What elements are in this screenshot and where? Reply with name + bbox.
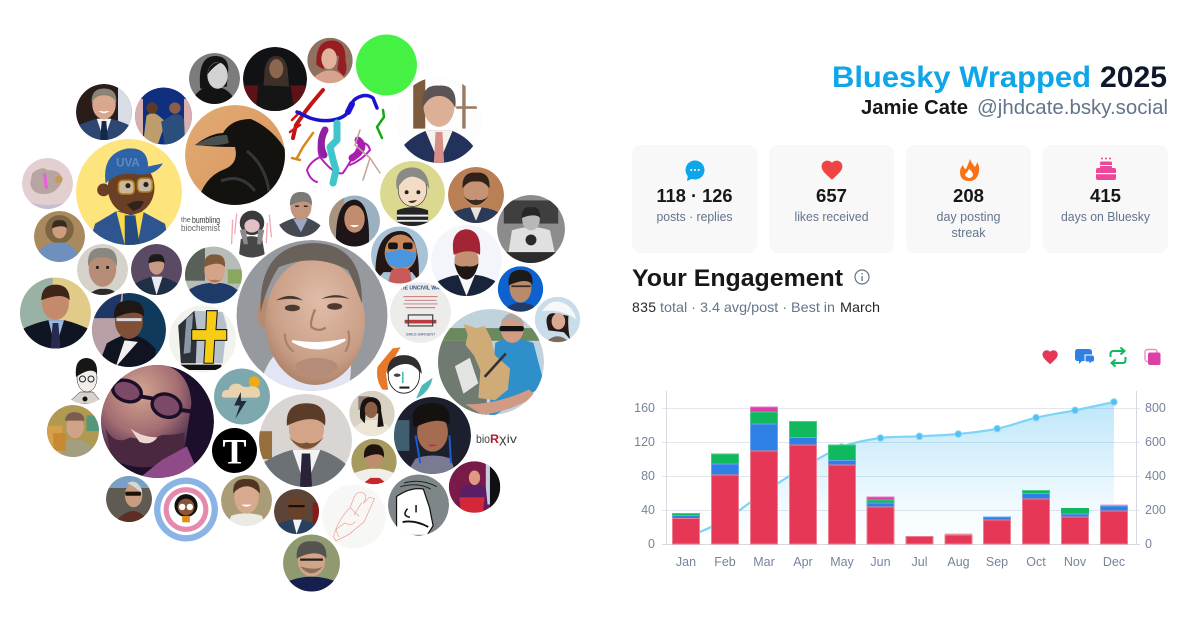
avatar: mitre with yellow cross (169, 305, 236, 373)
panel: day posting streak: 208 (953, 186, 984, 206)
avatar: plain green circle (356, 34, 417, 96)
left axis labels: 120 (634, 435, 655, 449)
right axis labels: 200 (1145, 503, 1166, 517)
avatar: bioRxiv logo: χiv (499, 432, 517, 446)
panel: likes received: likes received (794, 210, 869, 224)
title: 2025 (1100, 61, 1167, 94)
stacked bars by month (672, 407, 1128, 544)
bar: Mar (750, 407, 778, 544)
heading: Your Engagement: Your Engagement (632, 265, 843, 292)
avatar: powerpuff cartoon on pink and blue rings (154, 478, 218, 542)
avatar: man in dark suit against purple curtain (131, 244, 182, 295)
avatar: the bumbling biochemist logo: the (181, 217, 191, 224)
left axis labels: 0 (648, 537, 655, 551)
left axis labels: 80 (641, 469, 655, 483)
avatar: woman with red hair (307, 38, 353, 83)
avatar: black and white portrait of woman (189, 53, 240, 104)
avatar: ink drawing of man in glasses (71, 358, 100, 404)
icon: replies legend (1075, 349, 1094, 364)
avatar: man in blue shirt under stone arch (34, 211, 85, 262)
avatar: red line sketch of reclining figure (322, 484, 386, 548)
panel: day posting streak: day posting (936, 210, 1001, 224)
avatar: older man in blazer (279, 192, 320, 237)
panel: posts and replies (632, 145, 757, 253)
avatar: man with glasses on bright blue (498, 266, 543, 312)
avatar: bioRxiv logo: bio (476, 432, 490, 446)
bar: Feb (712, 454, 738, 544)
right axis labels: 0 (1145, 537, 1152, 551)
month labels: Jun (870, 555, 891, 569)
panel: posts and replies: posts · replies (656, 210, 732, 224)
month labels: Sep (986, 555, 1008, 569)
avatar: woman with curly hair and blue earrings (394, 397, 471, 474)
avatar: two people shaking hands before flags (135, 88, 192, 144)
month labels: Aug (947, 555, 970, 569)
icon: info (855, 270, 869, 284)
bar: Jun (867, 497, 894, 544)
month labels: Jan (676, 555, 696, 569)
avatar: bioRxiv logo: R (490, 432, 499, 446)
bar: Jul (906, 536, 933, 544)
user name and handle: Jamie Cate (861, 97, 968, 119)
grid and axes (662, 391, 1140, 544)
panel: likes received: 657 (816, 186, 847, 206)
avatar: man in sunglasses on street (106, 476, 152, 522)
avatar: bearded man before brick wall (448, 167, 504, 223)
icon: quotes legend (1145, 350, 1160, 365)
right axis labels: 400 (1145, 469, 1166, 483)
avatar: raven on orange background (185, 105, 285, 205)
avatar: woman with glasses and US flag (92, 293, 166, 367)
avatar: grey cartoon face (388, 474, 449, 536)
avatar: cartoon man with blue UVA cap (76, 139, 182, 245)
avatar: man with dog, blue shirt (438, 309, 544, 415)
cumulative area (686, 402, 1114, 544)
avatar: New York Times logo: T (222, 432, 247, 472)
avatar: man in grey suit with polka dot tie (259, 394, 352, 487)
engagement summary: 835 (632, 299, 656, 315)
icon: birthday cake (1096, 158, 1116, 180)
month labels: Apr (793, 555, 813, 569)
avatar: grey haired man close-up (77, 244, 128, 295)
avatar: animated girl with sunglasses and blue mask (371, 226, 428, 284)
avatar: cartoon man with striped shirt on olive (380, 161, 445, 226)
avatar: magenta lit person (449, 461, 500, 513)
panel: day posting streak: streak (952, 226, 986, 240)
icon: chat bubble (686, 160, 704, 181)
bar: May (828, 445, 856, 544)
avatar cluster: most interacted accounts (20, 34, 580, 592)
month labels: May (830, 555, 855, 569)
cumulative points (838, 399, 1117, 450)
panel: posts and replies: 118 · 126 (656, 186, 732, 206)
avatar: New York Times logo (212, 428, 257, 473)
legend icons (1043, 348, 1160, 366)
avatar: protein ribbon structure (290, 90, 384, 183)
icon: heart (822, 161, 842, 180)
bar: Dec (1100, 504, 1128, 544)
engagement summary: total · 3.4 avg/post · Best in (660, 299, 835, 315)
bar: Oct (1022, 490, 1050, 544)
avatar: young man in sports shirt (351, 439, 397, 484)
icon: flame (960, 159, 979, 181)
avatar: pink protein render (22, 158, 73, 209)
engagement summary (632, 299, 880, 315)
title: Bluesky Wrapped (832, 61, 1091, 94)
avatar: weather app logo with cloud and lightning (214, 368, 270, 424)
cumulative line (686, 402, 1114, 538)
avatar: cartoon man with blue UVA cap: UVA (116, 157, 140, 170)
month labels: Oct (1026, 555, 1046, 569)
engagement summary: March (840, 299, 880, 315)
right axis labels (1145, 401, 1166, 551)
bar: Jan (672, 514, 700, 544)
month labels: Mar (753, 555, 775, 569)
icon: likes legend (1043, 350, 1058, 364)
left axis labels (634, 401, 655, 551)
avatar: woman with braids at desk (349, 391, 395, 436)
right axis labels: 800 (1145, 401, 1166, 415)
avatar: grey haired man with glasses outdoors (283, 534, 340, 592)
bar: Nov (1062, 508, 1088, 544)
avatar: woman in black dress, red theatre (243, 47, 307, 111)
panel: days on Bluesky: days on Bluesky (1061, 210, 1151, 224)
avatar: the bumbling biochemist logo: bumbling (192, 215, 220, 226)
left axis labels: 40 (641, 503, 655, 517)
avatar: smiling woman with long dark hair (329, 196, 380, 246)
avatar: blurry close-up of man in dark glasses (99, 363, 214, 478)
user name and handle: @jhdcate.bsky.social (977, 97, 1168, 119)
avatar: book cover, The Uncivil War: GREG SARGENT (406, 333, 436, 337)
month labels: Dec (1103, 555, 1125, 569)
month labels (676, 555, 1125, 569)
avatar: the bumbling biochemist logo (181, 215, 220, 233)
panel: days on Bluesky: 415 (1090, 186, 1121, 206)
bar: Aug (945, 534, 972, 544)
avatar: cartoon face with orange and teal shapes (377, 345, 433, 401)
panel: day posting streak (906, 145, 1031, 253)
avatar: the bumbling biochemist logo: biochemist (181, 223, 220, 233)
engagement chart (634, 391, 1166, 569)
avatar: man in glasses and dark suit (274, 489, 319, 534)
month labels: Jul (912, 555, 927, 569)
avatar: book cover, The Uncivil War: THE UNCIVIL WAR (398, 285, 444, 291)
month labels: Feb (714, 555, 736, 569)
bar: Apr (790, 422, 816, 544)
avatar: man in cap with beer (47, 405, 99, 457)
avatar: bearded man with red turban (431, 225, 502, 296)
left axis labels: 160 (634, 401, 655, 415)
avatar: woman with white sunhat (535, 297, 580, 342)
avatar: black and white man leaning on table (497, 195, 565, 263)
icon: reposts legend (1110, 348, 1126, 366)
avatar: monochrome manga figure with pink marks (231, 210, 272, 258)
avatar: bioRxiv logo (476, 432, 517, 446)
avatar: smiling young man with lanyard (221, 475, 272, 526)
user name and handle (861, 97, 1168, 119)
panel: likes received (769, 145, 894, 253)
avatar: main user portrait, smiling man (236, 240, 388, 391)
avatar: man in suit before Capitol dome (20, 278, 91, 348)
panel: days on Bluesky (1043, 145, 1168, 253)
avatar: man in navy suit, smiling (76, 84, 132, 140)
bar: Sep (984, 517, 1010, 544)
right axis labels: 600 (1145, 435, 1166, 449)
avatar: smiling man with floral tie (404, 79, 477, 163)
month labels: Nov (1064, 555, 1087, 569)
avatar: bearded man in blue sweater (185, 246, 242, 304)
avatar: book cover, The Uncivil War (390, 282, 451, 343)
